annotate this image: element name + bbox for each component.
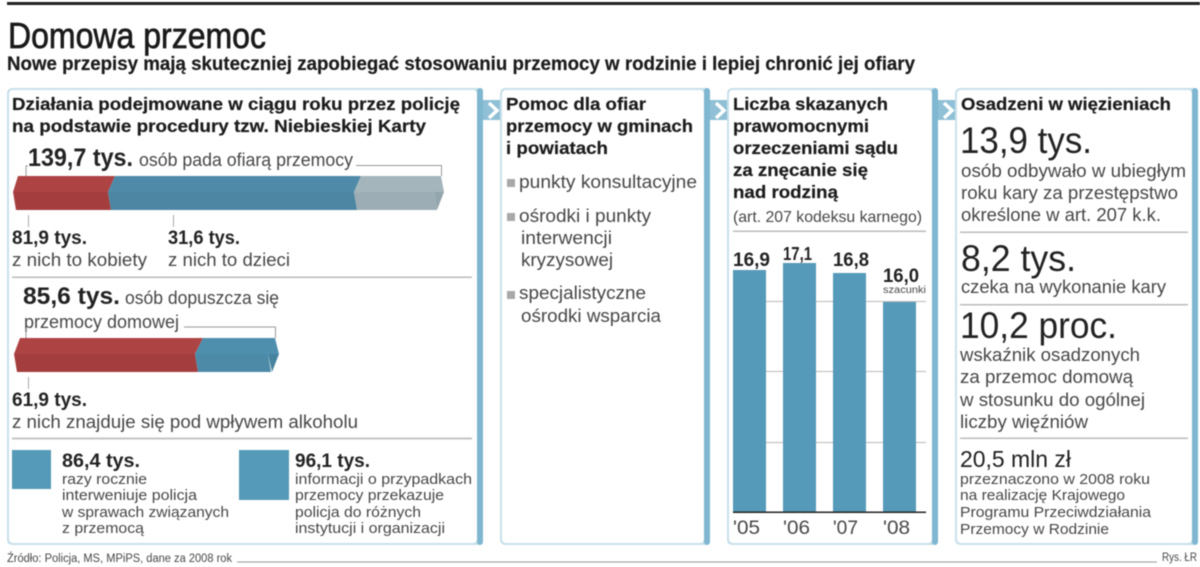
- stat: 86,4 tys.: z przemocą: [62, 520, 145, 537]
- bar 2008: [883, 266, 926, 539]
- stat: 86,4 tys.: interweniuje policja: [62, 487, 198, 504]
- list item 2: ośrodki i punkty: [519, 206, 651, 226]
- stat: 86,4 tys.: razy rocznie: [62, 471, 147, 488]
- stat: 20,5 mln zł: Przemocy w Rodzinie: [960, 521, 1109, 538]
- stat: 85,6 tys.: przemocy domowej: [24, 312, 179, 332]
- panel: convictions: [727, 88, 938, 545]
- stat: women: z nich to kobiety: [12, 250, 147, 270]
- bar 2007: [833, 250, 869, 539]
- stat: 20,5 mln zł: Programu Przeciwdziałania: [960, 504, 1152, 521]
- stat: women: 81,9 tys.: [12, 228, 87, 249]
- panel: police actions: [7, 88, 483, 545]
- list item 2: interwencji: [521, 228, 612, 248]
- arrow 3: [938, 100, 955, 120]
- stat: 139,7 tys.: osób pada ofiarą przemocy: [139, 150, 353, 170]
- bar 2008: szacunki: [883, 285, 926, 296]
- panel heading: prawomocnymi: [733, 116, 869, 136]
- stat: 10,2 proc.: liczby więźniów: [960, 412, 1089, 432]
- icon: square 1: [12, 450, 51, 489]
- stat: 13,9 tys.: [960, 120, 1186, 225]
- stat: 10,2 proc.: 10,2 proc.: [960, 305, 1117, 346]
- stat: 20,5 mln zł: [960, 446, 1152, 538]
- note: (art. 207 kodeksu karnego): [733, 209, 922, 226]
- bar 2008: '08: [883, 518, 910, 539]
- source note: Źródło: Policja, MS, MPiPS, dane za 2008 rok: [7, 552, 232, 565]
- bar 2005: 16,9: [733, 250, 770, 271]
- stat: 13,9 tys.: osób odbywało w ubiegłym: [961, 161, 1186, 181]
- stat: 10,2 proc.: w stosunku do ogólnej: [959, 390, 1145, 410]
- panel heading: za znęcanie się: [733, 160, 868, 180]
- panel heading: przemocy w gminach: [506, 116, 693, 136]
- bar 2006: [783, 244, 816, 539]
- stat: 20,5 mln zł: na realizację Krajowego: [960, 487, 1125, 504]
- stat: 86,4 tys.: [61, 451, 229, 537]
- panel heading: Osadzeni w więzieniach: [961, 94, 1171, 114]
- list item 3: [507, 283, 662, 326]
- bar: victims: [13, 176, 444, 210]
- stat: 10,2 proc.: [959, 305, 1145, 432]
- stat: 86,4 tys.: w sprawach związanych: [61, 504, 229, 521]
- bar 2005: '05: [733, 518, 760, 539]
- stat: 139,7 tys.: [26, 144, 442, 176]
- stat: 20,5 mln zł: przeznaczono w 2008 roku: [960, 471, 1150, 488]
- stat: children: [168, 228, 290, 270]
- panel heading: [12, 94, 460, 136]
- panel heading: i powiatach: [506, 138, 608, 158]
- bar: perpetrators: [14, 338, 279, 372]
- stat: alcohol: [12, 390, 358, 432]
- stat: 96,1 tys.: 96,1 tys.: [295, 451, 370, 472]
- panel heading: na podstawie procedury tzw. Niebieskiej Karty: [12, 116, 426, 136]
- panel heading: Pomoc dla ofiar: [506, 94, 646, 114]
- stat: alcohol: 61,9 tys.: [12, 390, 87, 411]
- stat: 13,9 tys.: 13,9 tys.: [960, 120, 1092, 161]
- list item 1: punkty konsultacyjne: [519, 172, 697, 192]
- stat: 8,2 tys.: [961, 238, 1166, 297]
- subtitle: Nowe przepisy mają skuteczniej zapobiegać stosowaniu przemocy w rodzinie i lepiej chronić jej ofiary: [7, 54, 915, 75]
- list item 2: [507, 206, 651, 270]
- panel heading: orzeczeniami sądu: [733, 138, 898, 158]
- list item 3: ośrodki wsparcia: [521, 306, 662, 326]
- stat: alcohol: z nich znajduje się pod wpływem alkoholu: [12, 412, 358, 432]
- panel heading: Działania podejmowane w ciągu roku przez policję: [12, 94, 460, 114]
- bar chart: [733, 244, 926, 539]
- arrow 1: [483, 100, 500, 120]
- icon: square 2: [239, 450, 289, 500]
- panel heading: [733, 94, 898, 202]
- stat: women: [12, 228, 147, 270]
- stat: 85,6 tys.: osób dopuszcza się: [125, 288, 279, 308]
- arrow 2: [710, 100, 727, 120]
- stat: 10,2 proc.: wskaźnik osadzonych: [959, 345, 1140, 365]
- stat: 96,1 tys.: policja do różnych: [295, 504, 421, 521]
- stat: 96,1 tys.: [295, 451, 472, 537]
- stat: 86,4 tys.: 86,4 tys.: [62, 451, 140, 472]
- stat: 139,7 tys.: 139,7 tys.: [28, 144, 133, 172]
- stat: 96,1 tys.: instytucji i organizacji: [295, 520, 445, 537]
- marker line: [28, 377, 30, 389]
- stat: 96,1 tys.: przemocy przekazuje: [295, 487, 444, 504]
- panel heading: [506, 94, 693, 158]
- title: Domowa przemoc: [8, 15, 266, 56]
- list item 2: kryzysowej: [521, 250, 613, 270]
- stat: 85,6 tys.: [23, 283, 279, 338]
- stat: 13,9 tys.: określone w art. 207 k.k.: [961, 205, 1161, 225]
- bar 2007: '07: [833, 518, 858, 539]
- stat: 96,1 tys.: informacji o przypadkach: [295, 471, 472, 488]
- panel: help for victims: [500, 88, 710, 545]
- stat: 10,2 proc.: za przemoc domową: [960, 367, 1134, 387]
- bar 2008: 16,0: [883, 266, 919, 287]
- stat: 8,2 tys.: 8,2 tys.: [961, 238, 1076, 279]
- marker lines: [28, 215, 174, 227]
- stat: children: z nich to dzieci: [168, 250, 290, 270]
- bar 2006: 17,1: [783, 244, 812, 264]
- stat: 85,6 tys.: 85,6 tys.: [23, 283, 120, 310]
- panel heading: nad rodziną: [733, 182, 838, 202]
- list item 3: specjalistyczne: [519, 283, 646, 303]
- bar 2007: 16,8: [833, 250, 869, 271]
- stat: 20,5 mln zł: 20,5 mln zł: [960, 446, 1071, 472]
- stat: 8,2 tys.: czeka na wykonanie kary: [961, 277, 1166, 297]
- panel heading: Liczba skazanych: [733, 94, 888, 114]
- bar 2006: '06: [783, 518, 810, 539]
- bar 2005: [733, 250, 770, 539]
- panel: prisoners: [955, 88, 1198, 545]
- stat: 13,9 tys.: roku kary za przestępstwo: [961, 183, 1178, 203]
- stat: children: 31,6 tys.: [168, 228, 240, 249]
